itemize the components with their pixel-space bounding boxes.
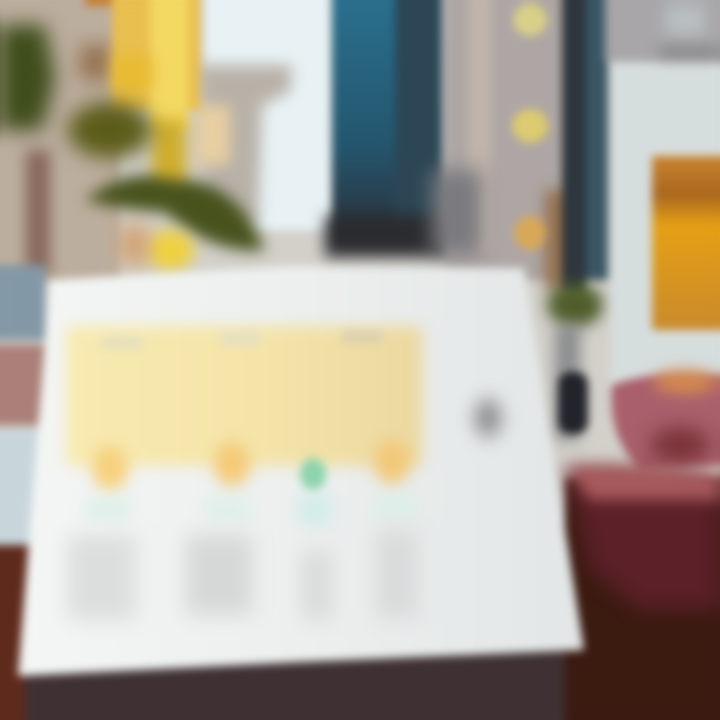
marker: teal <box>300 458 326 490</box>
card 1 marker <box>92 446 128 490</box>
lights: yellow windows <box>512 4 548 250</box>
text block: column 4 body <box>376 530 418 618</box>
sofa: red seat <box>565 466 720 720</box>
text block: column 3 body <box>302 550 332 620</box>
card 3 marker <box>374 440 410 484</box>
card 2 heading <box>220 332 260 346</box>
card 1 heading <box>102 336 142 350</box>
palm tree <box>0 25 265 275</box>
building: teal tower <box>325 0 450 257</box>
right wall <box>605 0 720 390</box>
building: grey facade <box>432 0 575 290</box>
sign: orange panel <box>652 156 720 330</box>
text block: column 1 body <box>68 535 136 620</box>
sky <box>205 0 330 230</box>
text block: column 2 body <box>186 535 252 615</box>
left street <box>0 265 45 545</box>
building: yellow <box>112 0 200 190</box>
panel: white infographic board <box>18 266 584 676</box>
table: dark wood <box>0 545 575 720</box>
building: dark column <box>547 0 608 440</box>
card 2 marker <box>214 442 250 486</box>
icon: small grey pictogram <box>469 393 507 443</box>
card: yellow columns <box>66 326 422 466</box>
building: brown facade left of yellow <box>80 0 135 80</box>
sofa: pink cushion <box>612 370 720 468</box>
building: mid beige behind sky <box>196 65 292 235</box>
card 3 heading <box>342 330 382 344</box>
tint: pale teal under markers <box>85 495 415 525</box>
